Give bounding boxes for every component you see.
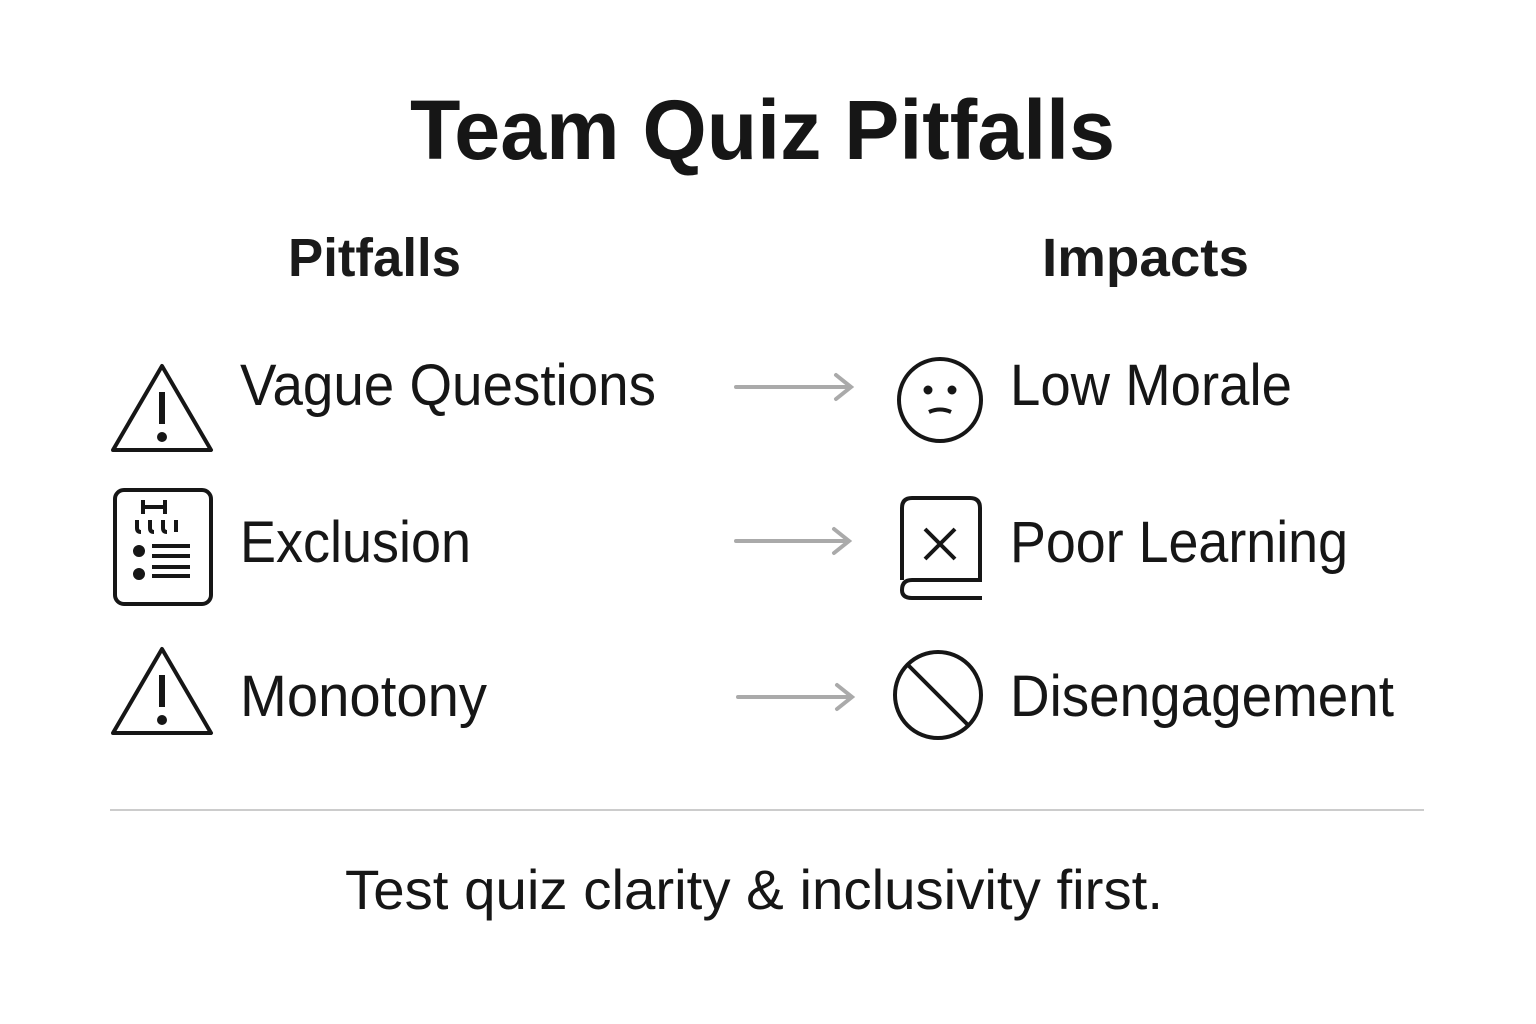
title: Team Quiz Pitfalls (410, 83, 1115, 177)
heading: Pitfalls: Pitfalls (288, 228, 461, 288)
text: Disengagement: Disengagement (1010, 664, 1394, 729)
heading: Impacts: Impacts (1042, 228, 1249, 288)
text: Monotony: Monotony (240, 664, 487, 729)
icon: sad face (899, 359, 981, 441)
row 1: vague questions (113, 353, 1292, 450)
arrow 3 (738, 685, 852, 709)
row 3: monotony (113, 649, 1394, 738)
icon: warning triangle (113, 649, 211, 733)
icon: list document (115, 490, 211, 604)
icon: ban symbol (895, 652, 981, 738)
arrow 2 (736, 529, 849, 553)
text: Poor Learning: Poor Learning (1010, 510, 1348, 575)
text: Vague Questions: Vague Questions (240, 353, 656, 418)
footer text: Test quiz clarity & inclusivity first. (345, 858, 1163, 921)
icon: warning triangle (113, 366, 211, 450)
icon: book with X (902, 498, 982, 598)
text: Low Morale: Low Morale (1010, 353, 1292, 418)
row 2: exclusion (115, 490, 1348, 604)
text: Exclusion: Exclusion (240, 510, 471, 575)
arrow 1 (736, 375, 851, 399)
